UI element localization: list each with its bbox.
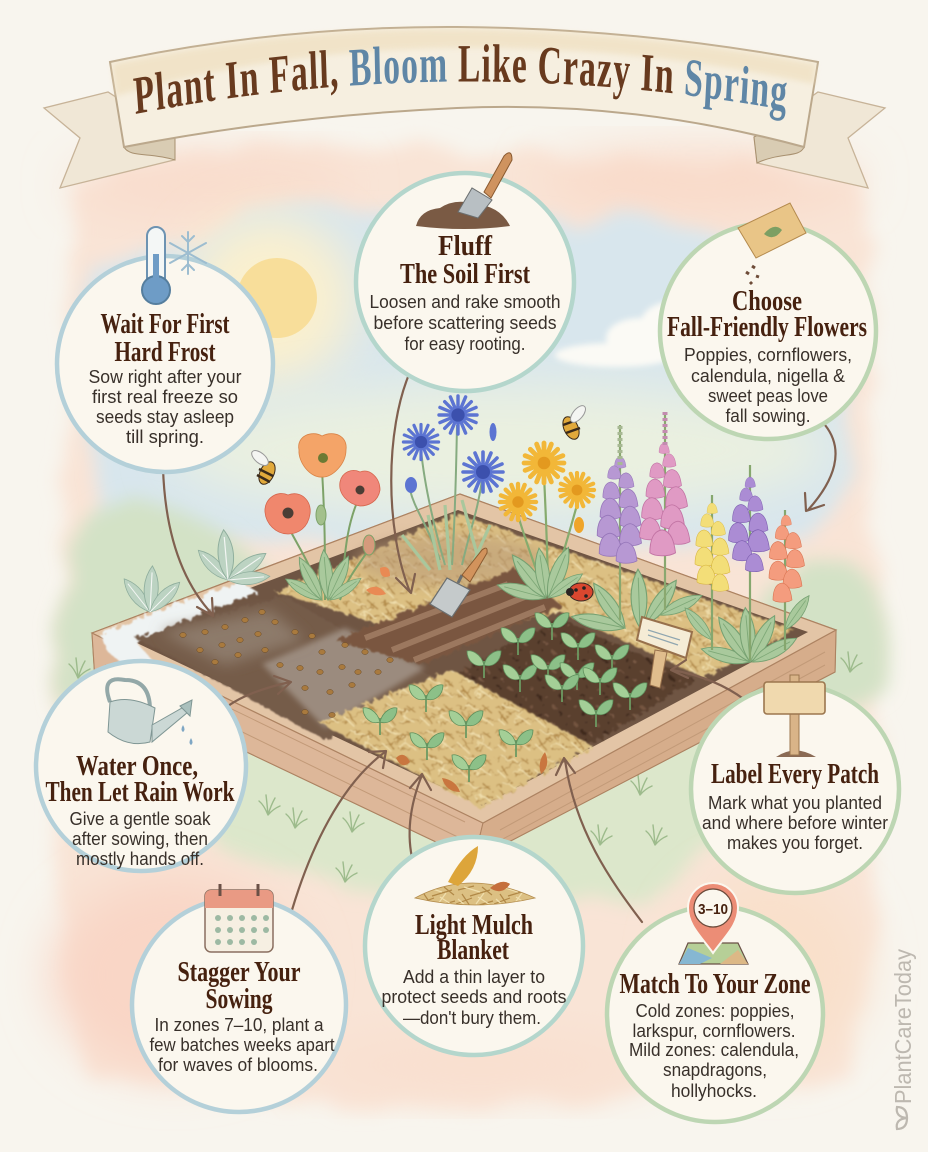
- body text: Mark what you planted: [708, 792, 882, 813]
- poppies: [265, 434, 390, 605]
- body text: In zones 7–10, plant a: [154, 1014, 324, 1035]
- heading: The Soil First: [400, 259, 531, 290]
- body text: larkspur, cornflowers.: [632, 1020, 796, 1041]
- body text: sweet peas love: [708, 385, 828, 406]
- icon: leaf mark: [897, 1107, 907, 1129]
- panel: water once: [36, 661, 246, 871]
- calendula: [496, 443, 594, 605]
- title ribbon: [42, 26, 886, 189]
- bed walls: [92, 494, 836, 860]
- icon: thermometer: [142, 227, 170, 304]
- cornflowers: [402, 396, 503, 570]
- arrow: label to sign: [671, 660, 745, 700]
- body text: for easy rooting.: [404, 333, 526, 354]
- ribbon body: [110, 27, 818, 147]
- heading: [178, 957, 300, 1015]
- panel: label every patch: [691, 675, 899, 893]
- body text: Sow right after your: [88, 366, 242, 387]
- body text: mostly hands off.: [76, 848, 204, 869]
- icon: map and pin: [679, 883, 748, 964]
- seeded patch: [135, 596, 445, 740]
- arrow: frost to soil: [163, 468, 213, 616]
- arrow: water to seeds: [212, 676, 291, 720]
- heading: [667, 286, 867, 343]
- arrow: fluff to soil: [391, 372, 415, 593]
- straw back band: [275, 514, 795, 678]
- body text: Mild zones: calendula,: [629, 1039, 799, 1060]
- ribbon folds: [124, 132, 175, 160]
- bed rim: [92, 494, 836, 823]
- body text: —don't bury them.: [403, 1007, 541, 1028]
- panel: stagger your sowing: [132, 884, 346, 1112]
- arrow: flowers to bed: [805, 425, 836, 511]
- body text: before scattering seeds: [374, 312, 556, 333]
- icon: mulch pile with leaf: [415, 846, 535, 905]
- raised garden bed: [92, 396, 836, 860]
- frosted plants at back left: [119, 529, 270, 617]
- body text: first real freeze so: [92, 386, 238, 407]
- body text: for waves of blooms.: [158, 1054, 318, 1075]
- body text: [702, 792, 888, 853]
- fluffed soil patch: [335, 568, 562, 665]
- body text: few batches weeks apart: [150, 1034, 334, 1055]
- center trowel: [430, 548, 487, 617]
- body text: [684, 344, 852, 426]
- foxgloves: [570, 412, 704, 635]
- heading: Match To Your Zone: [620, 969, 810, 1000]
- snapdragons: [681, 465, 814, 669]
- arrow: mulch to bed: [410, 774, 431, 862]
- body text: Give a gentle soak: [70, 808, 211, 829]
- soil base: [122, 510, 808, 806]
- panel: choose fall-friendly flowers: [660, 203, 876, 439]
- panel: match to your zone: [607, 883, 823, 1122]
- heading: Wait For First: [100, 309, 230, 340]
- body text: till spring.: [126, 426, 204, 447]
- body text: and where before winter: [702, 812, 888, 833]
- body text: [88, 366, 242, 447]
- ladybug: [566, 583, 593, 601]
- body text: [629, 1000, 799, 1101]
- panel: light mulch blanket: [365, 837, 583, 1055]
- body text: seeds stay asleep: [96, 406, 234, 427]
- arrow: zone to bed: [556, 758, 642, 922]
- panel: fluff the soil first: [356, 153, 574, 391]
- heading: Label Every Patch: [711, 759, 879, 790]
- body text: protect seeds and roots: [382, 986, 566, 1007]
- watercolor wash background: [50, 146, 890, 1108]
- body text: hollyhocks.: [671, 1080, 757, 1101]
- body text: Cold zones: poppies,: [636, 1000, 794, 1021]
- heading: Then Let Rain Work: [46, 777, 235, 808]
- icon: calendar: [205, 884, 273, 952]
- grass tufts: [69, 652, 862, 882]
- icon: seed packet: [738, 203, 806, 284]
- body text: after sowing, then: [72, 828, 208, 849]
- body text: snapdragons,: [663, 1059, 767, 1080]
- left tail: [44, 92, 175, 188]
- heading: Hard Frost: [114, 337, 216, 368]
- arrow: stagger to mulch: [292, 751, 386, 910]
- frost on rim: [100, 582, 258, 684]
- icon: snowflake: [170, 232, 206, 274]
- icon: map and pin: 3–10: [698, 901, 728, 918]
- heading: [400, 231, 531, 290]
- heading: [415, 910, 533, 966]
- heading: Stagger Your: [178, 957, 300, 988]
- body text: fall sowing.: [726, 405, 810, 426]
- body text: [150, 1014, 334, 1075]
- title text: Plant In Fall, Bloom Like Crazy In Spring: [133, 44, 787, 121]
- body text: Poppies, cornflowers,: [684, 344, 852, 365]
- body text: Loosen and rake smooth: [370, 291, 560, 312]
- icon: trowel in soil: [416, 153, 512, 229]
- heading: Blanket: [437, 935, 510, 966]
- heading: Water Once,: [76, 751, 198, 782]
- icon: wooden sign: [764, 675, 825, 757]
- right tail: [754, 92, 885, 188]
- cloud: [555, 302, 700, 367]
- body text: [382, 966, 566, 1028]
- heading: [46, 751, 235, 808]
- bees: [249, 403, 588, 487]
- heading: [100, 309, 230, 368]
- heading: Sowing: [206, 984, 272, 1015]
- body text: calendula, nigella &: [691, 365, 846, 386]
- heading: Fall-Friendly Flowers: [667, 312, 867, 343]
- body text: [370, 291, 560, 354]
- seedlings: [363, 613, 647, 792]
- sun: [237, 258, 317, 338]
- heading: Choose: [732, 286, 802, 317]
- plant label sign: [637, 617, 692, 688]
- seedling patch: [452, 618, 695, 745]
- watermark: PlantCareToday: [890, 949, 916, 1104]
- heading: Fluff: [438, 231, 493, 262]
- panel: wait for first hard frost: [57, 227, 273, 472]
- body text: [70, 808, 211, 869]
- body text: makes you forget.: [727, 832, 863, 853]
- seeds: [180, 610, 393, 718]
- icon: watering can: [107, 679, 192, 745]
- mulch patch: [318, 670, 594, 808]
- body text: Add a thin layer to: [403, 966, 545, 987]
- heading: Light Mulch: [415, 910, 533, 941]
